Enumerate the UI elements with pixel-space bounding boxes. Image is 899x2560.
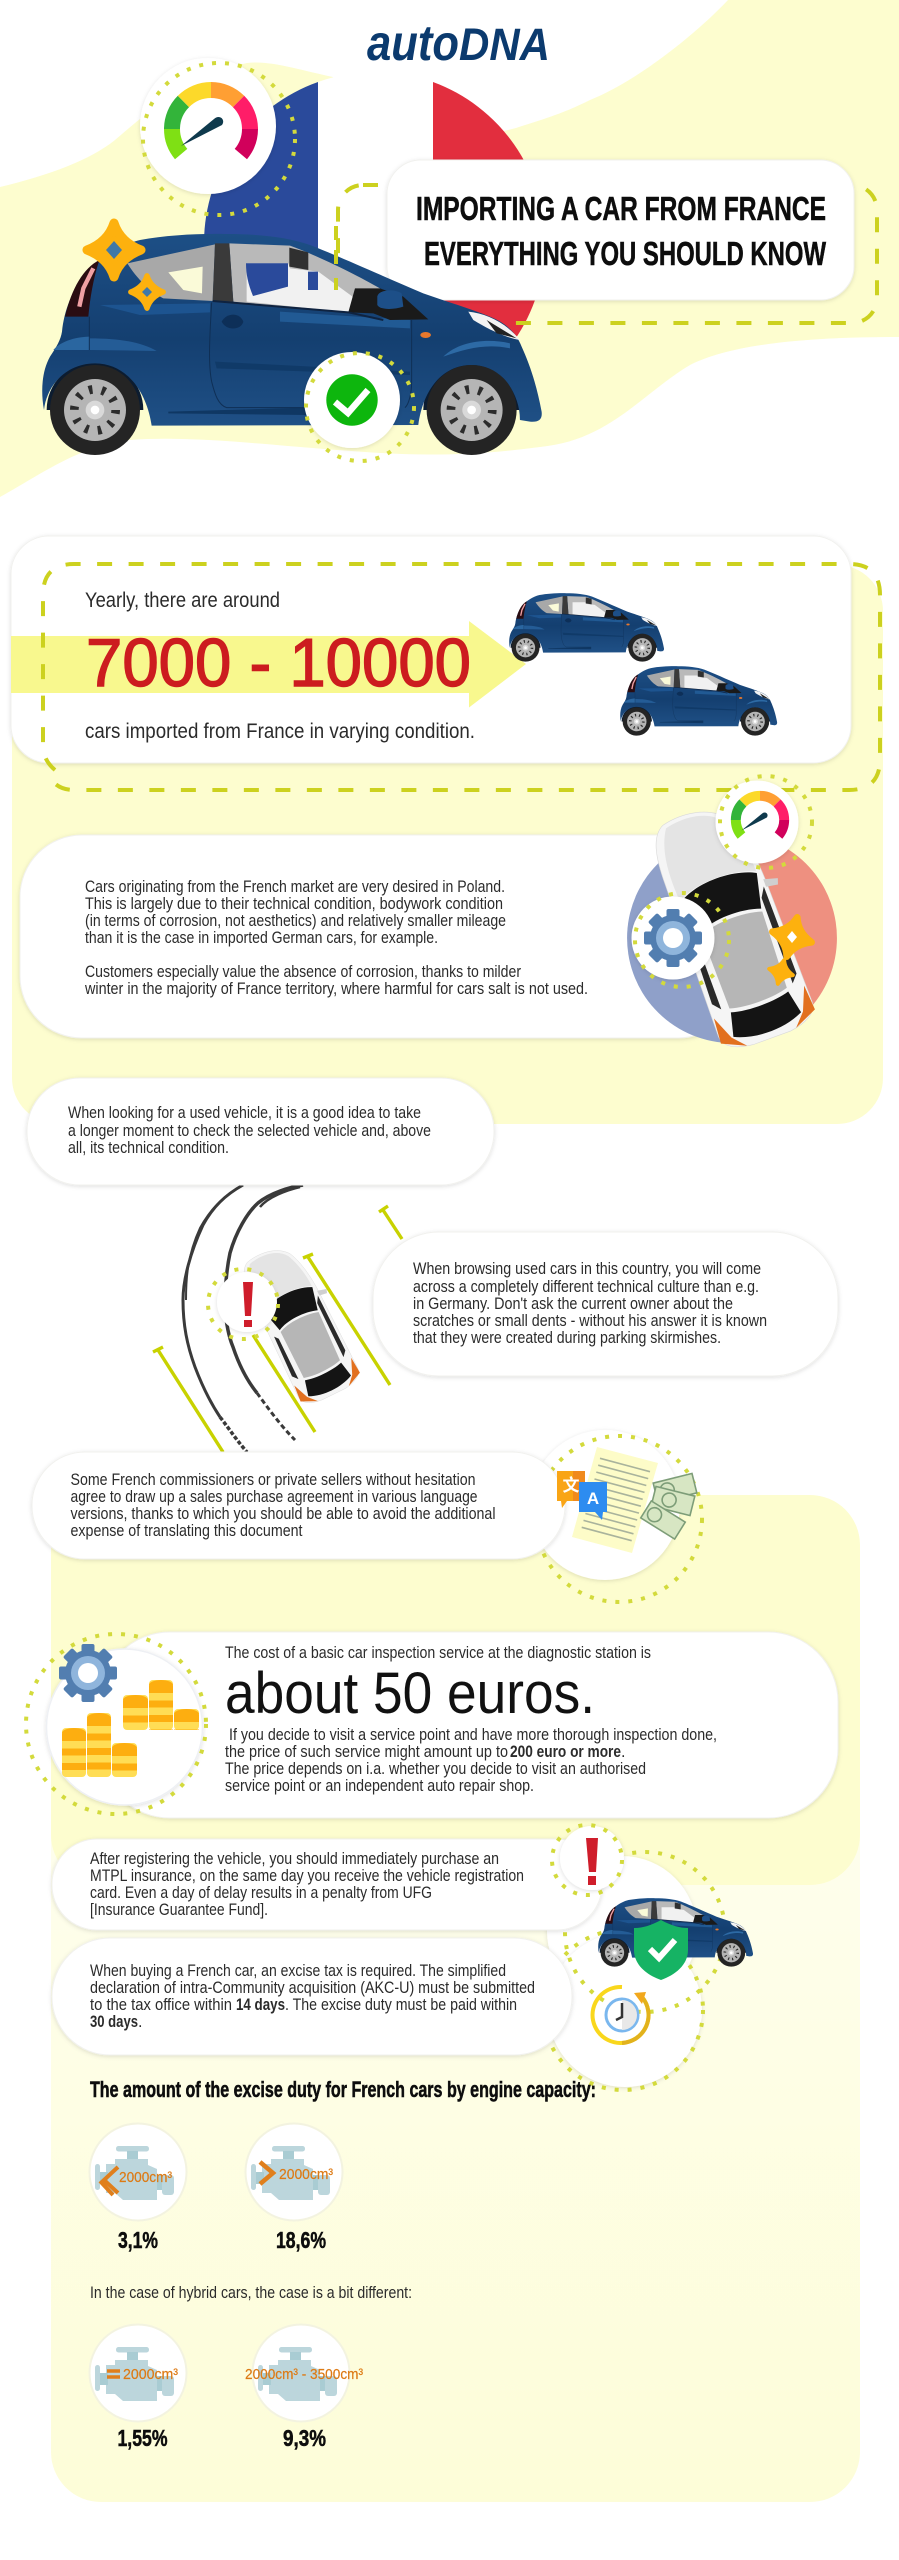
value: 18,6%: 18,6%	[276, 2227, 326, 2253]
card: excise tax	[52, 1938, 572, 2055]
card: looking for a used vehicle	[27, 1078, 494, 1185]
engine one	[90, 2124, 186, 2220]
text block: When looking for a used vehicle, it is a good idea to take	[68, 1104, 421, 1122]
logo: DNA	[459, 19, 550, 70]
text block	[225, 1726, 717, 1795]
card: MTPL insurance	[52, 1839, 602, 1930]
icon: check badge	[304, 352, 414, 461]
title	[416, 190, 827, 272]
text block: This is largely due to their technical condition, bodywork condition	[85, 895, 503, 913]
text block: that they were created during parking skirmishes.	[413, 1329, 721, 1347]
arrow	[11, 621, 526, 708]
text block: After registering the vehicle, you should immediately purchase an	[90, 1850, 499, 1868]
icon: shield	[634, 1920, 688, 1980]
text: hybrid intro: In the case of hybrid cars, the case is a bit different:	[90, 2284, 412, 2302]
card: inspection cost	[100, 1632, 838, 1818]
text block: in Germany. Don't ask the current owner about the	[413, 1295, 733, 1313]
engine two: 2000cm³	[279, 2166, 333, 2183]
icon: coins and gear badge	[26, 1634, 206, 1814]
value: 9,3%: 9,3%	[283, 2425, 326, 2451]
text block: Some French commissioners or private sellers without hesitation	[70, 1471, 476, 1489]
text: cars imported: cars imported from France in varying condition.	[85, 719, 475, 743]
text block: to the tax office within	[90, 1996, 232, 2014]
translate icon: 文	[562, 1475, 580, 1495]
text block	[90, 1850, 524, 1919]
text block: When browsing used cars in this country, you will come	[413, 1260, 761, 1278]
badge circles behind insurance cards	[543, 1852, 725, 2090]
text block: Cars originating from the French market are very desired in Poland.	[85, 878, 505, 896]
icon: sparkles on car	[766, 912, 817, 987]
text block: If you decide to visit a service point and have more thorough inspection done,	[229, 1726, 717, 1744]
card: yearly imports	[11, 536, 851, 763]
text block: expense of translating this document	[70, 1522, 303, 1540]
value: 1,55%: 1,55%	[118, 2425, 168, 2451]
French flag circle	[204, 72, 545, 413]
text block: MTPL insurance, on the same day you receive the vehicle registration	[90, 1867, 524, 1885]
money	[641, 1473, 697, 1539]
panel: pale lower background	[51, 1780, 860, 2502]
big price: about 50 euros.	[225, 1661, 595, 1726]
top-down car badge	[597, 776, 867, 1073]
translate icon	[557, 1471, 607, 1520]
text block: (in terms of corrosion, not aesthetics) and relatively smaller mileage	[85, 912, 506, 930]
card: French commissioners	[32, 1452, 565, 1559]
engine one: 2000cm³	[119, 2169, 172, 2186]
text block: . The excise duty must be paid within	[285, 1996, 517, 2014]
text block: across a completely different technical culture than e.g.	[413, 1278, 759, 1296]
big number: 7000 - 10000	[86, 625, 471, 701]
panel: yellow background two	[51, 1495, 860, 1885]
skid illustration	[153, 1185, 402, 1452]
engine four: 2000cm³ - 3500cm³	[245, 2366, 363, 2383]
text block	[413, 1260, 767, 1347]
small car two	[620, 666, 777, 736]
text block: all, its technical condition.	[68, 1139, 229, 1157]
engine three	[90, 2324, 186, 2422]
hero car	[42, 226, 542, 455]
card: browsing used cars	[373, 1232, 838, 1376]
icon: gauge badge	[140, 58, 295, 215]
text block	[68, 1104, 431, 1157]
title dashed frame	[338, 185, 877, 323]
text block	[90, 1962, 535, 2031]
engine two	[246, 2124, 342, 2220]
text block: When buying a French car, an excise tax is required. The simplified	[90, 1962, 506, 1980]
coin stacks	[62, 1680, 199, 1777]
text block	[70, 1471, 496, 1540]
text: cost intro: The cost of a basic car inspection service at the diagnostic station is	[225, 1644, 651, 1662]
card: French market text	[20, 835, 740, 1038]
lime lines	[153, 1206, 402, 1452]
heading: excise duty: The amount of the excise duty for French cars by engine capacity:	[90, 2077, 596, 2102]
top-down car	[235, 1235, 369, 1409]
title card	[387, 160, 854, 300]
logo	[367, 15, 550, 71]
translate icon: A	[587, 1489, 599, 1508]
text block: [Insurance Guarantee Fund].	[90, 1901, 268, 1919]
panel: yellow background one	[12, 565, 883, 1124]
text block: 30 days	[90, 2013, 138, 2031]
icon: warning badge	[208, 1269, 278, 1339]
document	[572, 1447, 658, 1553]
icon: clock	[593, 1987, 649, 2043]
translation badge circle	[530, 1430, 702, 1602]
icon: gear badge	[632, 893, 729, 987]
text block: a longer moment to check the selected vehicle and, above	[68, 1122, 431, 1140]
text block: The price depends on i.a. whether you decide to visit an authorised	[225, 1760, 646, 1778]
text block: the price of such service might amount up to	[225, 1743, 508, 1761]
text block: 200 euro or more	[510, 1743, 621, 1761]
text block: agree to draw up a sales purchase agreement in various language	[70, 1488, 478, 1506]
text block: scratches or small dents - without his answer it is known	[413, 1312, 767, 1330]
text block: .	[621, 1743, 626, 1761]
icon: warning badge small	[552, 1825, 624, 1895]
text block: 14 days	[236, 1996, 285, 2014]
logo: auto	[367, 15, 459, 71]
text: yearly: Yearly, there are around	[85, 588, 280, 612]
text block: service point or an independent auto repair shop.	[225, 1777, 534, 1795]
text block: card. Even a day of delay results in a penalty from UFG	[90, 1884, 432, 1902]
second dashed frame	[43, 564, 880, 790]
skid marks	[183, 1185, 303, 1452]
text block: Customers especially value the absence of corrosion, thanks to milder	[85, 963, 522, 981]
value: 3,1%: 3,1%	[118, 2227, 158, 2253]
small car one	[509, 593, 664, 662]
text block: declaration of intra-Community acquisition (AKC-U) must be submitted	[90, 1979, 535, 1997]
text block: than it is the case in imported German cars, for example.	[85, 929, 438, 947]
text block: .	[138, 2013, 142, 2031]
icon: small gauge badge	[716, 776, 812, 868]
text block: winter in the majority of France territory, where harmful for cars salt is not used.	[84, 980, 588, 998]
engine three: 2000cm³	[123, 2366, 178, 2383]
small car with shield	[598, 1898, 753, 1980]
text block	[84, 878, 588, 998]
icon: document with translation and money	[557, 1447, 697, 1553]
engine four	[245, 2324, 363, 2422]
background blob	[0, 0, 899, 497]
icon: sparkles	[87, 223, 163, 308]
text block: versions, thanks to which you should be able to avoid the additional	[70, 1505, 496, 1523]
